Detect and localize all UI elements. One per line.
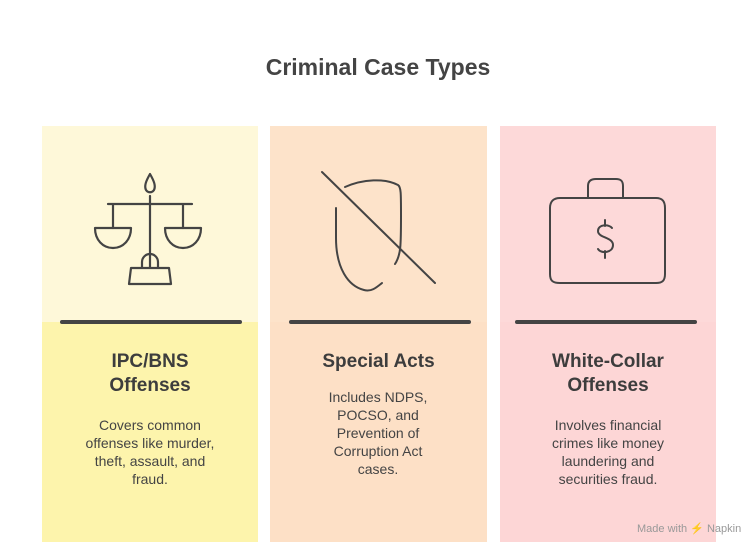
watermark: Made with ⚡ Napkin: [637, 523, 741, 535]
heading: Special Acts: Special Acts: [322, 351, 435, 372]
heading: White-Collar: Offenses: [567, 375, 649, 396]
heading: IPC/BNS: Offenses: [109, 375, 191, 396]
heading: IPC/BNS: IPC/BNS: [111, 351, 189, 372]
heading: White-Collar: [552, 351, 664, 396]
text: Special: Includes NDPS, POCSO, and Prevention of Corruption Act cases.: [329, 389, 427, 477]
text: White collar: Involves financial crimes like money laundering and securities fraud.: [552, 417, 664, 487]
title: Criminal Case Types: [266, 54, 490, 80]
heading: White-Collar: White-Collar: [552, 351, 664, 372]
heading: IPC/BNS: [109, 351, 191, 396]
panel: IPC/BNS: [42, 126, 258, 542]
panel: White-Collar: [500, 126, 716, 542]
panel: Special Acts: [270, 126, 487, 542]
text: IPC: Covers common offenses like murder, theft, assault, and fraud.: [86, 417, 214, 487]
dividers: [60, 320, 242, 324]
